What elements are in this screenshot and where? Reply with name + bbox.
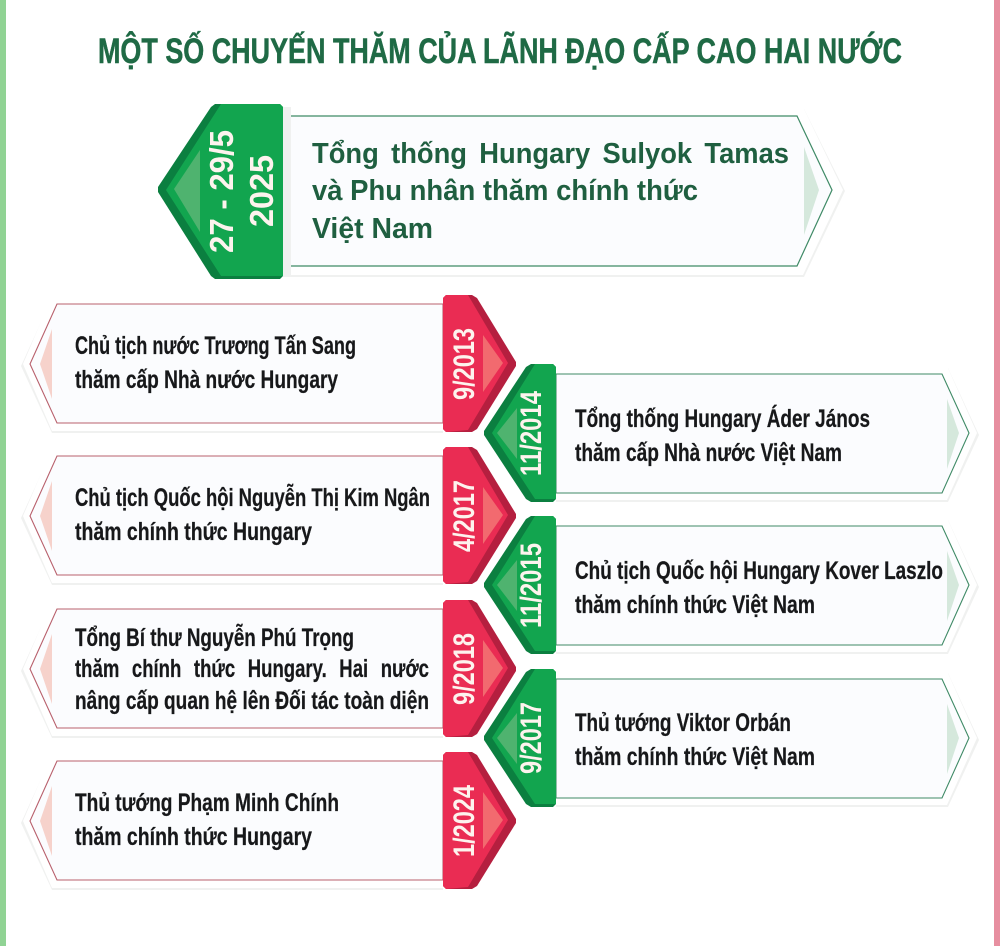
panel: 9/2013 bbox=[21, 295, 516, 433]
text: Thủ tướng Phạm Minh Chính bbox=[75, 789, 339, 817]
panel: 2025 visit bbox=[158, 104, 845, 279]
date badge: 9/2013: 9/2013 bbox=[448, 328, 481, 400]
text: nâng cấp quan hệ lên Đối tác toàn diện bbox=[75, 687, 429, 715]
date badge: 11/2015 bbox=[484, 516, 556, 654]
text: thăm cấp Nhà nước Việt Nam bbox=[575, 439, 842, 467]
text: Chủ tịch nước Trương Tấn Sang bbox=[75, 332, 356, 360]
text: 2025 visit: và Phu nhân thăm chính thức bbox=[312, 175, 698, 207]
date badge: 27 - 29/5 2025 bbox=[158, 104, 283, 279]
text: thăm cấp Nhà nước Hungary bbox=[75, 366, 338, 394]
date badge: 27 - 29/5 2025: 2025 bbox=[243, 155, 280, 227]
date badge: 11/2014 bbox=[484, 364, 556, 502]
date badge: 27 - 29/5 2025: 27 - 29/5 bbox=[203, 130, 240, 253]
text: Tổng thống Hungary Áder János bbox=[575, 404, 870, 433]
text bbox=[75, 622, 429, 715]
text: 2025 visit: Tổng thống Hungary Sulyok Tamas bbox=[312, 138, 789, 170]
date badge: 11/2015: 11/2015 bbox=[515, 543, 548, 628]
text bbox=[575, 404, 870, 467]
text bbox=[75, 332, 356, 394]
text: thăm chính thức Hungary bbox=[75, 823, 312, 851]
text bbox=[575, 709, 815, 771]
date badge: 1/2024 bbox=[443, 752, 516, 889]
date badge: 9/2018 bbox=[443, 600, 516, 737]
text: Thủ tướng Viktor Orbán bbox=[575, 709, 791, 737]
text: thăm chính thức Việt Nam bbox=[575, 743, 815, 771]
panel: 9/2017 bbox=[484, 669, 979, 807]
text bbox=[575, 557, 943, 619]
text: thăm chính thức Hungary bbox=[75, 518, 312, 546]
left side bar bbox=[0, 0, 6, 946]
panel: 4/2017 bbox=[21, 447, 516, 585]
date badge: 9/2018: 9/2018 bbox=[448, 633, 481, 705]
text: 2025 visit bbox=[312, 138, 789, 245]
panel: 1/2024 bbox=[21, 752, 516, 890]
right side bar bbox=[994, 0, 1000, 946]
text bbox=[75, 482, 430, 546]
date badge: 1/2024: 1/2024 bbox=[448, 785, 481, 857]
date badge: 9/2017: 9/2017 bbox=[515, 702, 548, 774]
text: thăm chính thức Hungary. Hai nước bbox=[75, 655, 429, 683]
panel: 11/2015 bbox=[484, 516, 979, 654]
text: Tổng Bí thư Nguyễn Phú Trọng bbox=[75, 622, 354, 652]
date badge: 4/2017: 4/2017 bbox=[448, 480, 481, 552]
text: 2025 visit: Việt Nam bbox=[312, 213, 433, 245]
date badge: 11/2014: 11/2014 bbox=[515, 391, 548, 476]
date badge: 9/2017 bbox=[484, 669, 556, 807]
panel: 11/2014 bbox=[484, 364, 979, 502]
date badge: 9/2013 bbox=[443, 295, 516, 432]
panel: 9/2018 bbox=[21, 600, 516, 738]
date badge: 4/2017 bbox=[443, 447, 516, 584]
text: thăm chính thức Việt Nam bbox=[575, 591, 815, 619]
text bbox=[75, 789, 339, 851]
text: Chủ tịch Quốc hội Nguyễn Thị Kim Ngân bbox=[75, 482, 430, 512]
